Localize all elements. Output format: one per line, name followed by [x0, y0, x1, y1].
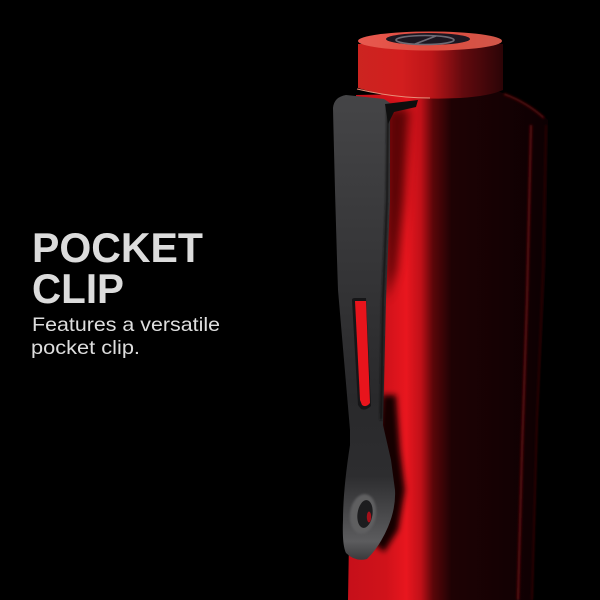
- clip eyelet: [347, 492, 379, 536]
- cap recessed centre: [386, 33, 470, 45]
- clip shadow on upper barrel: [386, 108, 410, 300]
- clip shadow on lower barrel: [370, 395, 405, 552]
- barrel ridge highlights: [504, 94, 546, 600]
- description: Features a versatile: [32, 314, 220, 336]
- pen cap: [357, 32, 503, 99]
- heading: CLIP: [32, 265, 124, 312]
- cap logo: [396, 36, 454, 44]
- heading: POCKET: [32, 224, 203, 271]
- clip slot: [352, 298, 371, 410]
- clip top dark fold: [385, 100, 418, 124]
- description: [31, 314, 220, 359]
- cap seam: [357, 89, 430, 98]
- clip inner edge: [381, 108, 388, 420]
- cap top rim: [358, 32, 502, 50]
- pocket clip: [333, 95, 418, 560]
- heading: [32, 224, 203, 312]
- pen barrel: [348, 92, 548, 600]
- description: pocket clip.: [31, 337, 140, 359]
